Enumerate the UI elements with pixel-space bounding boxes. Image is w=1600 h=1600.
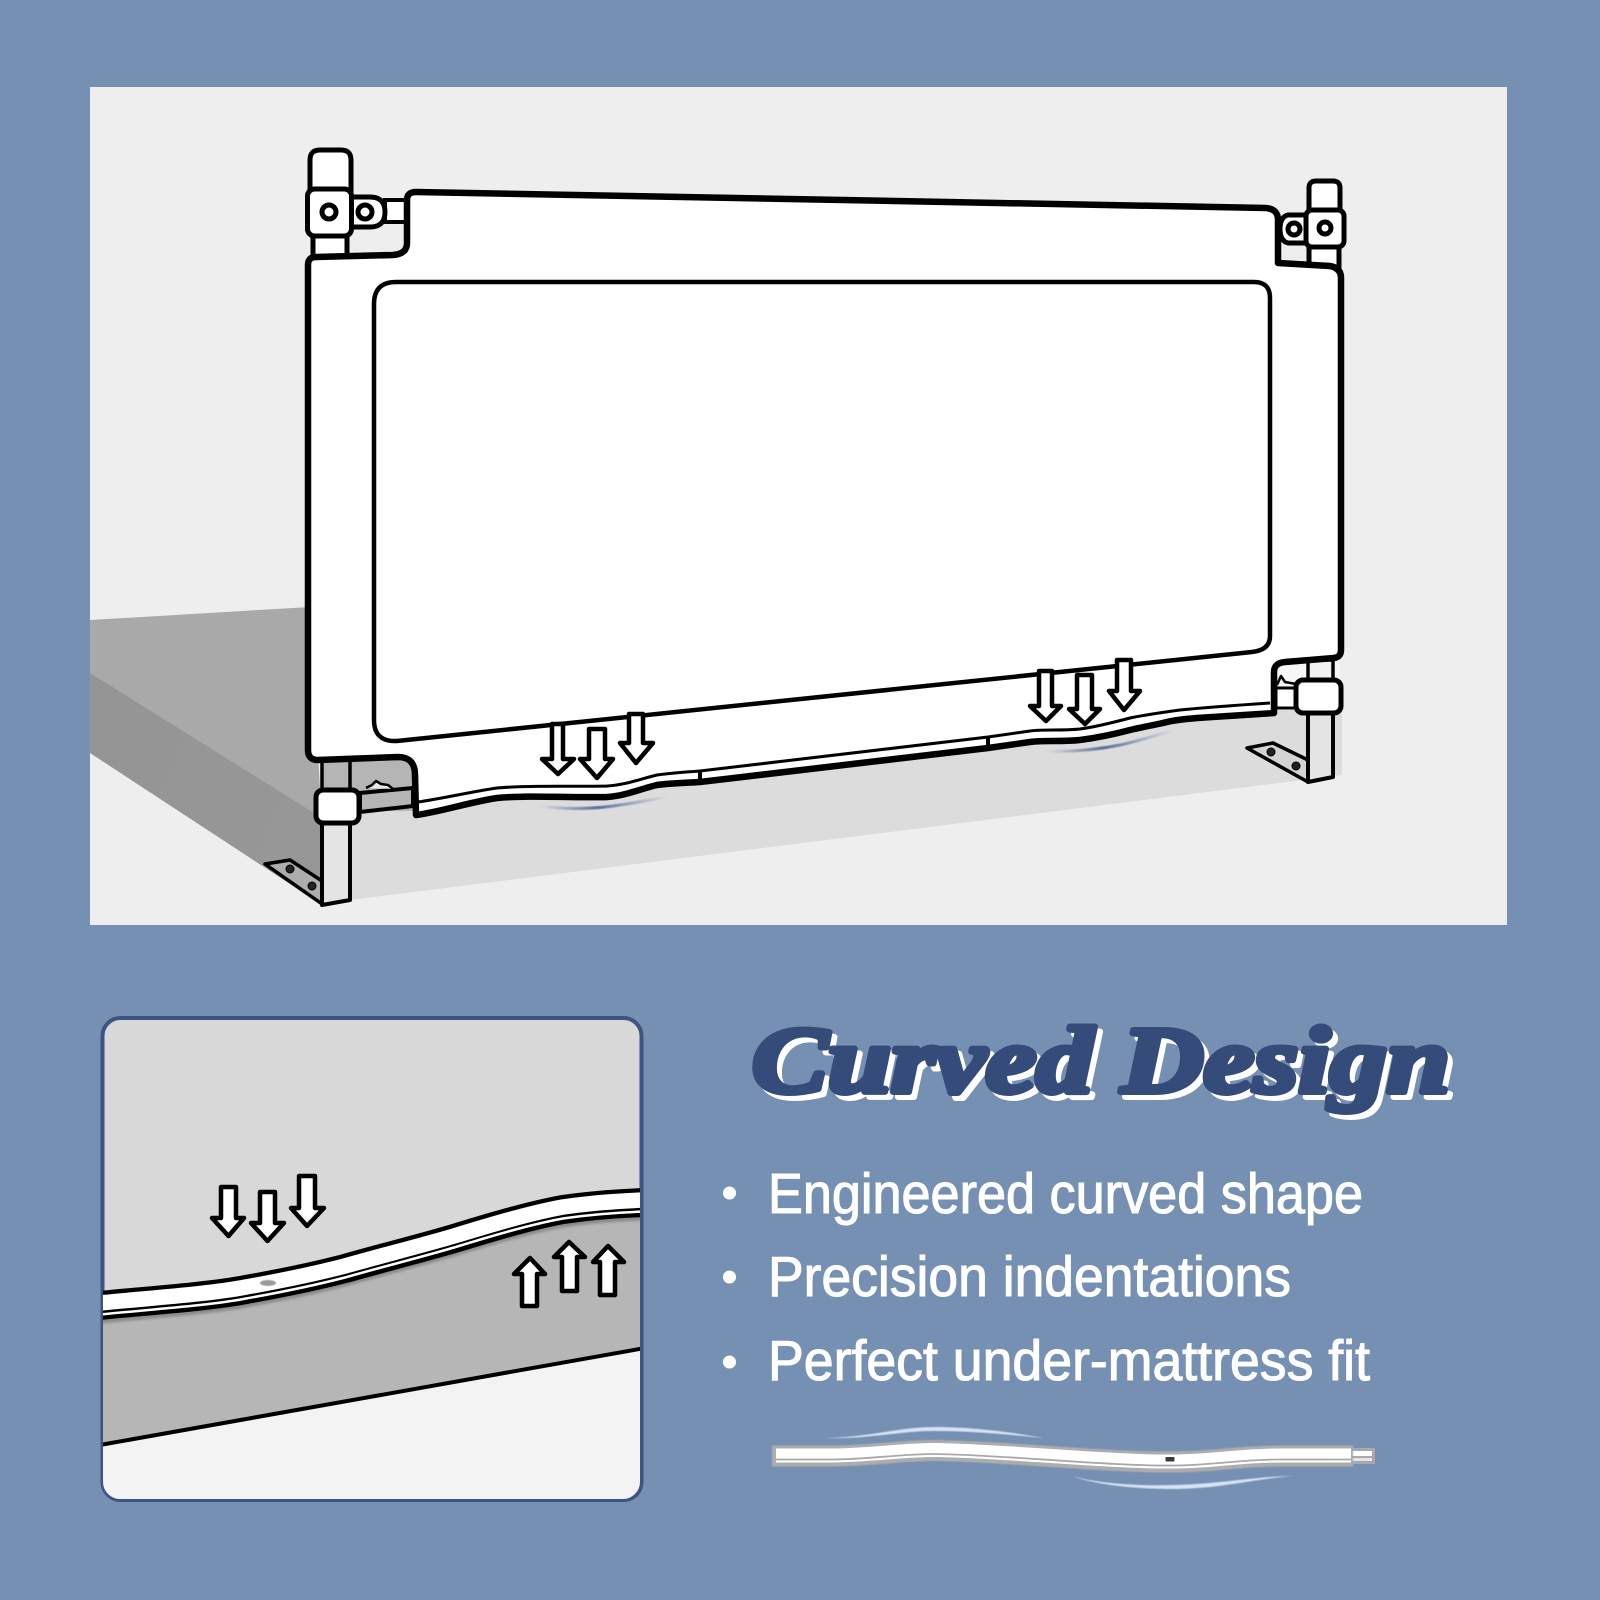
bullet 2: Precision indentations xyxy=(768,1245,1291,1309)
down arrows xyxy=(212,1176,324,1241)
mattress side face xyxy=(90,673,322,905)
lower motion wisp xyxy=(1072,1476,1293,1489)
up arrows xyxy=(514,1242,624,1306)
curved rail cross-section xyxy=(100,1200,645,1321)
mattress top face xyxy=(90,607,322,825)
bullet 1: Engineered curved shape xyxy=(768,1162,1363,1226)
left lower post and bar behind the rail xyxy=(265,757,417,905)
down arrows left group xyxy=(542,714,653,778)
mattress band xyxy=(103,1219,640,1442)
right upper post xyxy=(1280,181,1344,267)
panel: bed rail illustration xyxy=(90,87,1507,925)
blue motion arc right xyxy=(1047,731,1173,751)
blue motion arc left xyxy=(540,797,667,808)
bullet 3: Perfect under-mattress fit xyxy=(768,1329,1370,1393)
curved rail side view xyxy=(772,1427,1375,1489)
indentation dimple xyxy=(260,1280,276,1286)
rail body xyxy=(772,1450,1353,1466)
bottom rail upper edge xyxy=(418,703,1270,802)
rail indentation mark xyxy=(1166,1457,1174,1462)
left lower clamp xyxy=(316,790,359,823)
rail fabric panel xyxy=(308,192,1341,815)
upper motion wisp xyxy=(827,1427,1044,1438)
left upper post xyxy=(308,150,409,259)
floor xyxy=(100,1348,645,1500)
title: Curved Design xyxy=(752,1009,1450,1113)
bullet list xyxy=(724,1162,1370,1393)
right lower post and bracket xyxy=(1247,660,1340,782)
rail end cap xyxy=(1353,1448,1375,1464)
down arrows right group xyxy=(1030,660,1140,724)
mattress front face xyxy=(352,710,1342,900)
right lower clamp xyxy=(1296,680,1341,713)
panel: curved rail close-up xyxy=(100,1018,645,1500)
mesh window xyxy=(374,282,1270,741)
